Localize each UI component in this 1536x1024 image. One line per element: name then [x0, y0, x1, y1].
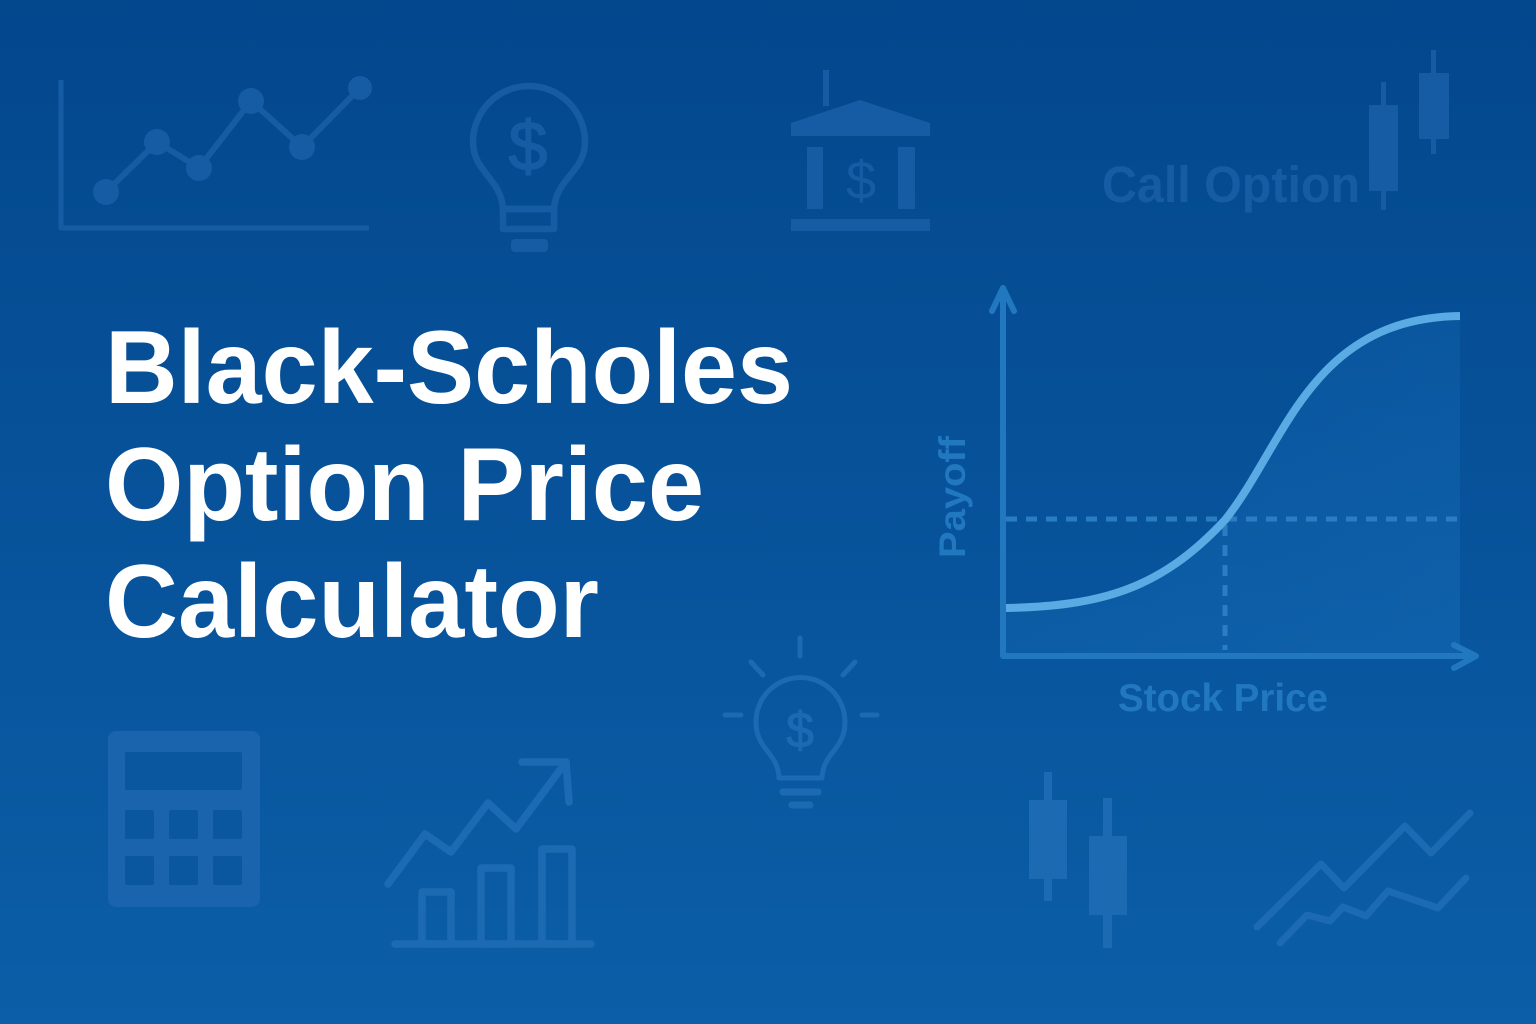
payoff curve: [1006, 316, 1460, 608]
title: [105, 310, 793, 660]
title: Calculator: [105, 544, 599, 660]
chart area fill: [1004, 316, 1460, 656]
icon: line chart top left: [61, 76, 372, 228]
icon: small light bulb with rays: $: [786, 702, 814, 758]
icon: bank: [791, 70, 930, 231]
title: Black-Scholes: [105, 310, 793, 426]
icon: candlesticks bottom: [1029, 772, 1127, 948]
payoff chart: [932, 288, 1476, 720]
icon: light bulb with dollar: [473, 86, 585, 252]
icon: light bulb with dollar: $: [509, 107, 547, 185]
title: Option Price: [105, 427, 704, 543]
icon: bank: $: [846, 151, 876, 211]
dashed guide lines: [1006, 519, 1460, 650]
text and icon: call option candlesticks: [1102, 50, 1449, 213]
y axis label: Payoff: [932, 435, 973, 558]
icon: calculator: [108, 731, 260, 907]
x axis label: Stock Price: [1118, 677, 1328, 720]
icon: growth bars and arrow: [388, 762, 591, 944]
chart axes: [992, 288, 1476, 668]
icon: double line trend: [1257, 813, 1470, 943]
text and icon: call option candlesticks: Call Option: [1102, 156, 1360, 213]
icon: small light bulb with rays: [725, 638, 877, 805]
